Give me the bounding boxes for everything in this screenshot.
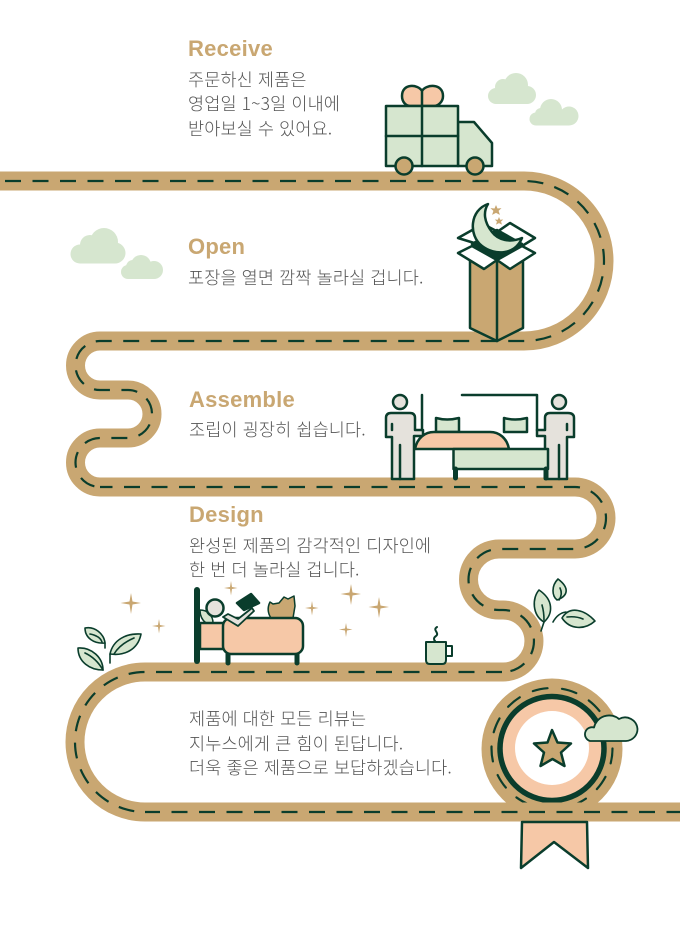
text: design description: 한 번 더 놀라실 겁니다. <box>189 557 360 582</box>
icon: person right <box>537 395 574 479</box>
cloud 4 <box>121 255 163 279</box>
text: closing message: 지누스에게 큰 힘이 된답니다. <box>189 731 403 756</box>
cloud on medal <box>585 715 638 741</box>
text: closing message: 제품에 대한 모든 리뷰는 <box>189 706 366 731</box>
icon: delivery truck <box>386 86 492 174</box>
icon: leaves left <box>78 628 141 670</box>
icon: person reading in bed with cat <box>197 590 303 663</box>
cloud 3 <box>70 228 126 264</box>
ribbon <box>521 822 588 868</box>
heading: Design: Design <box>189 502 264 527</box>
text: open description: 포장을 열면 깜짝 놀라실 겁니다. <box>188 265 423 290</box>
cloud 1 <box>488 73 536 104</box>
text: assemble description: 조립이 굉장히 쉽습니다. <box>189 417 366 442</box>
icon: star <box>534 730 571 766</box>
heading: Receive: Receive <box>188 36 273 61</box>
icon: leaves right <box>534 579 595 631</box>
icon: coffee mug <box>426 627 452 664</box>
icon: sparkles <box>120 581 389 637</box>
heading: Assemble: Assemble <box>189 387 295 412</box>
text: design description: 완성된 제품의 감각적인 디자인에 <box>189 533 431 558</box>
text: receive description: 받아보실 수 있어요. <box>188 116 332 141</box>
medal badge <box>482 678 622 820</box>
text: closing message: 더욱 좋은 제품으로 보답하겠습니다. <box>189 755 452 780</box>
icon: bed frame being assembled <box>415 395 548 478</box>
icon: open box with moon <box>458 204 535 341</box>
cloud 2 <box>530 99 578 126</box>
icon: person left <box>386 395 423 479</box>
winding road <box>0 181 680 812</box>
text: receive description: 주문하신 제품은 <box>188 67 307 92</box>
heading: Open: Open <box>188 234 245 259</box>
text: receive description: 영업일 1~3일 이내에 <box>188 91 340 116</box>
